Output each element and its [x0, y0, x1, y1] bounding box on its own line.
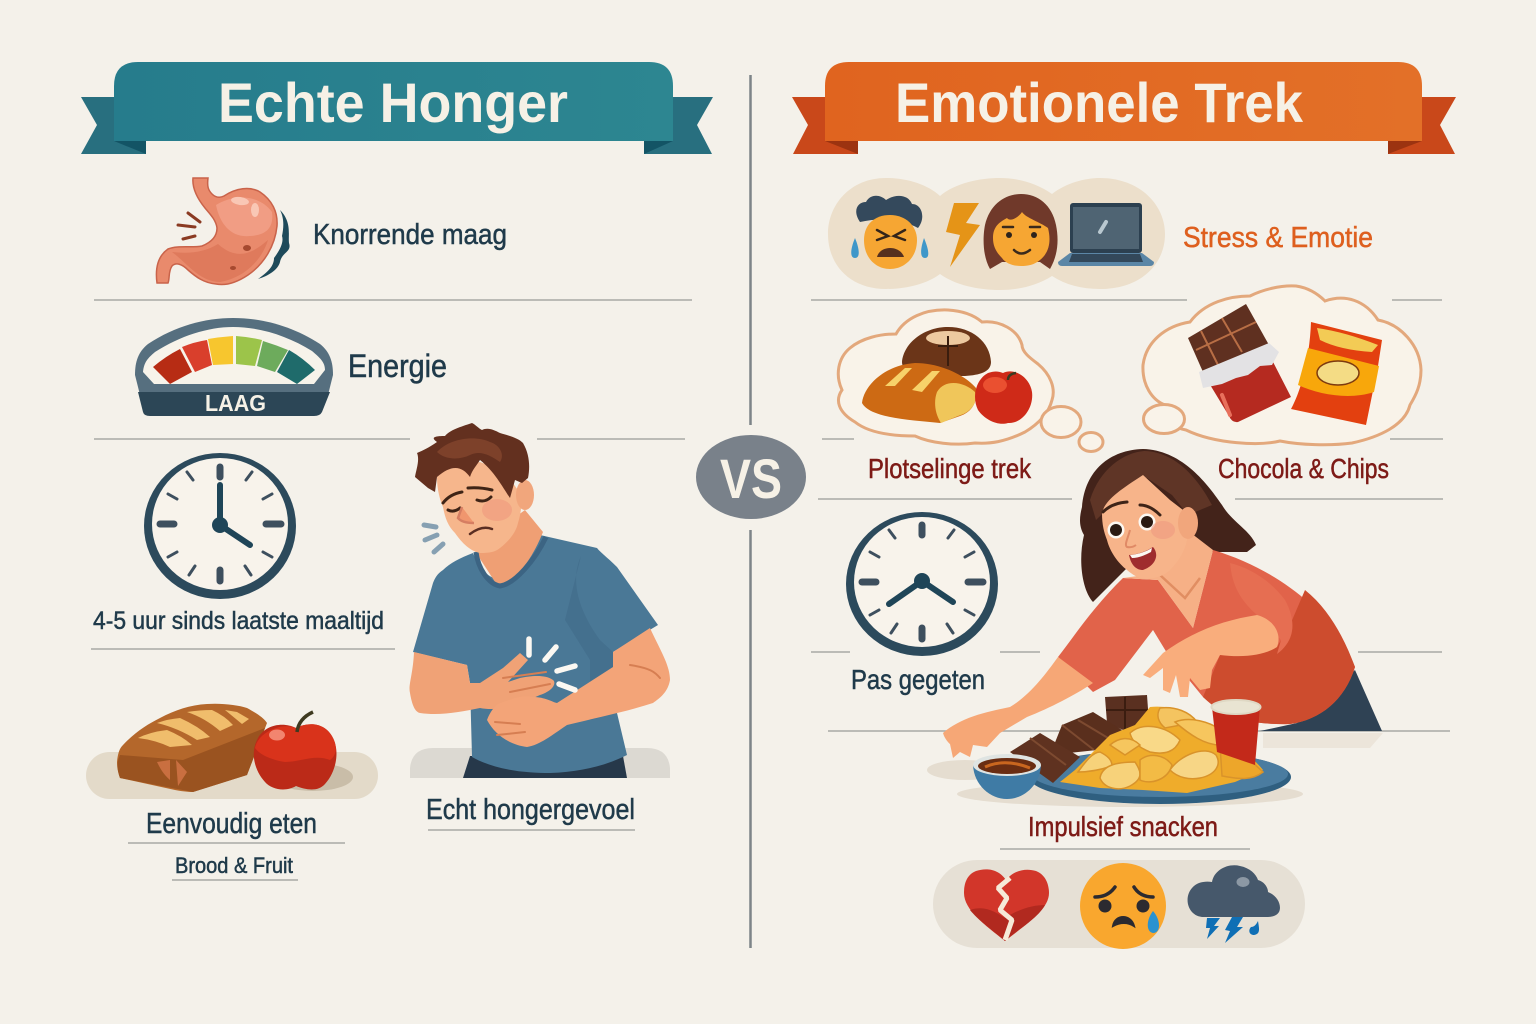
illustration: snack plate	[927, 695, 1383, 807]
icon: energy gauge	[135, 318, 333, 416]
banner: Echte Honger	[81, 62, 713, 154]
icon row: negative feelings	[933, 860, 1305, 949]
VS badge: VS	[720, 447, 782, 510]
icon: sad face	[1080, 863, 1166, 949]
label: Plotselinge trek: Plotselinge trek	[868, 453, 1032, 484]
banner: Emotionele Trek: Emotionele Trek	[895, 71, 1304, 134]
icon: clock 4 o'clock	[144, 453, 296, 599]
banner: Emotionele Trek	[792, 62, 1456, 154]
banner: Echte Honger: Echte Honger	[218, 71, 568, 134]
thought bubble: chocolate and chips	[1143, 286, 1421, 445]
divider lines	[749, 75, 752, 948]
label: Brood & Fruit: Brood & Fruit	[175, 853, 293, 878]
label: Energie: Energie	[348, 348, 447, 384]
label: Pas gegeten: Pas gegeten	[851, 664, 985, 695]
icon: stomach	[156, 178, 290, 285]
icon: bread and apple	[86, 704, 378, 799]
icon: energy gauge: LAAG	[205, 390, 266, 416]
illustration: hungry man	[410, 423, 670, 778]
label: 4-5 uur sinds laatste maaltijd: 4-5 uur sinds laatste maaltijd	[93, 607, 384, 635]
separator lines	[91, 300, 1450, 880]
icon group: stress and emotion	[828, 178, 1165, 290]
label: Impulsief snacken: Impulsief snacken	[1028, 811, 1218, 842]
VS badge	[696, 435, 806, 519]
label: Echt hongergevoel: Echt hongergevoel	[426, 794, 635, 826]
illustration: woman reaching for snacks	[943, 449, 1382, 758]
label: Eenvoudig eten: Eenvoudig eten	[146, 808, 317, 840]
label: Chocola & Chips: Chocola & Chips	[1218, 453, 1389, 484]
label: Knorrende maag: Knorrende maag	[313, 219, 507, 251]
icon: broken heart	[964, 869, 1049, 941]
thought bubble: sudden craving	[838, 310, 1103, 452]
icon: clock recently eaten	[846, 512, 998, 656]
label: Stress & Emotie: Stress & Emotie	[1183, 222, 1373, 254]
icon: storm cloud	[1188, 865, 1280, 943]
